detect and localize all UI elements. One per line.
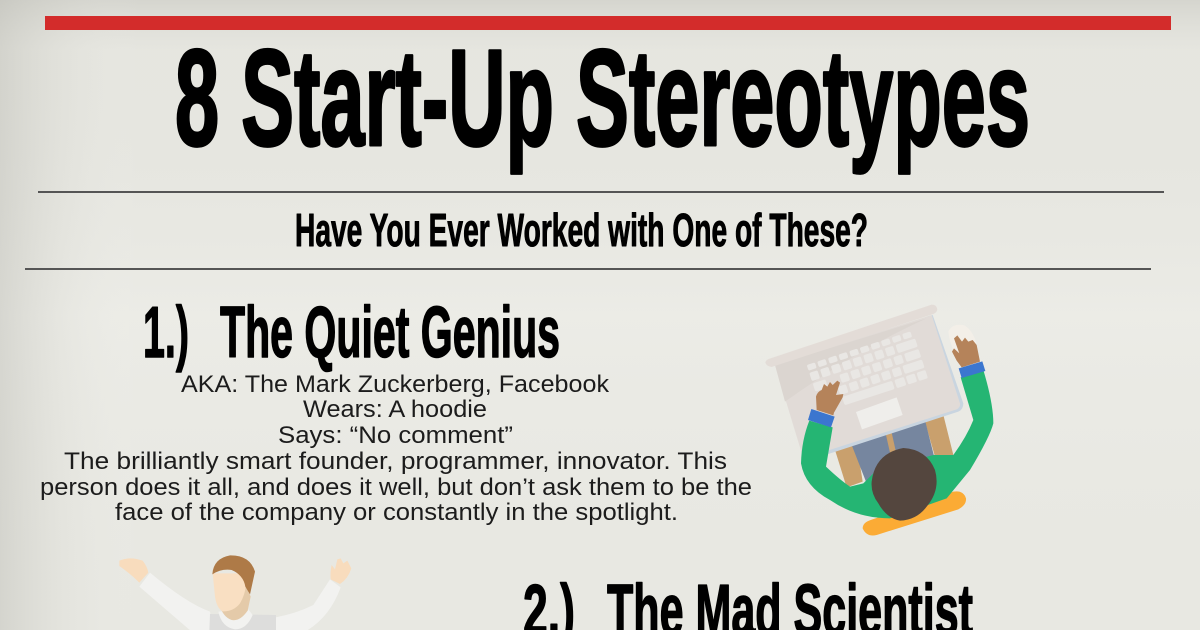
neck bbox=[219, 583, 251, 620]
vest bbox=[209, 614, 276, 630]
description 1: The brilliantly smart founder, programmer, innovator. This bbox=[64, 448, 727, 475]
right hand bbox=[952, 335, 980, 367]
hair bbox=[872, 448, 937, 521]
heading 1: 1.) bbox=[143, 293, 189, 373]
description 1: Says: “No comment” bbox=[278, 422, 513, 449]
arms bbox=[139, 573, 213, 630]
description 1: person does it all, and does it well, but don’t ask them to be the bbox=[40, 474, 752, 501]
hair bbox=[212, 555, 255, 594]
keyboard bbox=[807, 331, 928, 413]
divider bottom bbox=[25, 268, 1151, 270]
seat bbox=[863, 491, 966, 535]
face bbox=[213, 573, 246, 611]
trackpad bbox=[856, 397, 903, 429]
laptop bbox=[825, 315, 963, 454]
left hand bbox=[816, 381, 843, 415]
divider top bbox=[38, 191, 1164, 193]
heading 1 bbox=[143, 293, 560, 373]
description 1: AKA: The Mark Zuckerberg, Facebook bbox=[181, 371, 610, 398]
blue cuffs bbox=[808, 409, 835, 427]
mouse bbox=[948, 325, 977, 358]
figure: presenter with raised arms bbox=[119, 555, 351, 630]
collar bbox=[218, 609, 253, 629]
icon: programmer at laptop from above bbox=[765, 305, 993, 535]
section 2 heading: The Mad Scientist bbox=[523, 571, 973, 630]
section 1: The Quiet Genius bbox=[40, 293, 752, 526]
description 1: Wears: A hoodie bbox=[303, 396, 487, 423]
red top bar bbox=[45, 16, 1171, 30]
green sweater bbox=[801, 370, 993, 518]
description 1 bbox=[40, 371, 752, 526]
legs bbox=[835, 443, 863, 487]
heading 1: The Quiet Genius bbox=[220, 293, 560, 373]
hands bbox=[119, 558, 148, 583]
description 1: face of the company or constantly in the spotlight. bbox=[115, 499, 678, 526]
